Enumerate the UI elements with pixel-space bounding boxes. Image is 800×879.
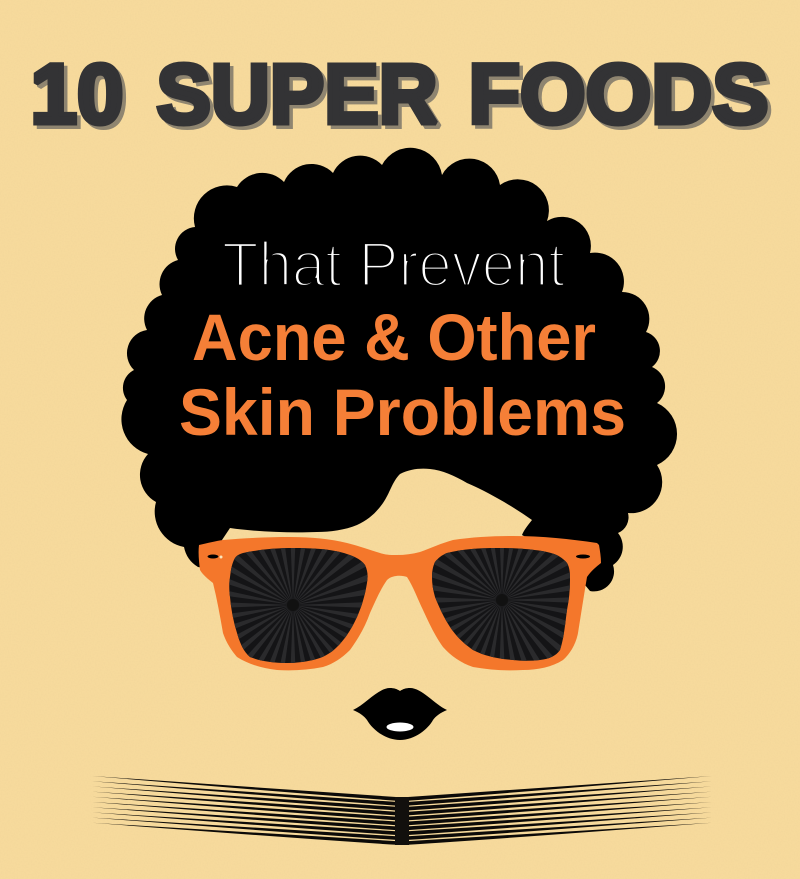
title: SUPER [156, 47, 438, 141]
subtitle: Skin Problems: Skin Problems [179, 375, 626, 449]
title: SUPER [160, 50, 441, 144]
right lens [432, 548, 570, 661]
sunglasses [198, 536, 601, 670]
left lens [229, 548, 368, 663]
subtitle: That Prevent: That Prevent [222, 230, 565, 300]
afro hair [121, 148, 677, 591]
title: 10 [34, 50, 127, 144]
decorative stripes [92, 776, 712, 845]
title: 10 [30, 47, 124, 141]
title: FOODS [468, 47, 768, 141]
glasses frame [199, 536, 601, 670]
title [30, 47, 772, 144]
lips [353, 688, 447, 740]
title: FOODS [472, 50, 772, 144]
subtitle: Acne & Other: Acne & Other [192, 300, 596, 374]
rivets [208, 554, 590, 558]
